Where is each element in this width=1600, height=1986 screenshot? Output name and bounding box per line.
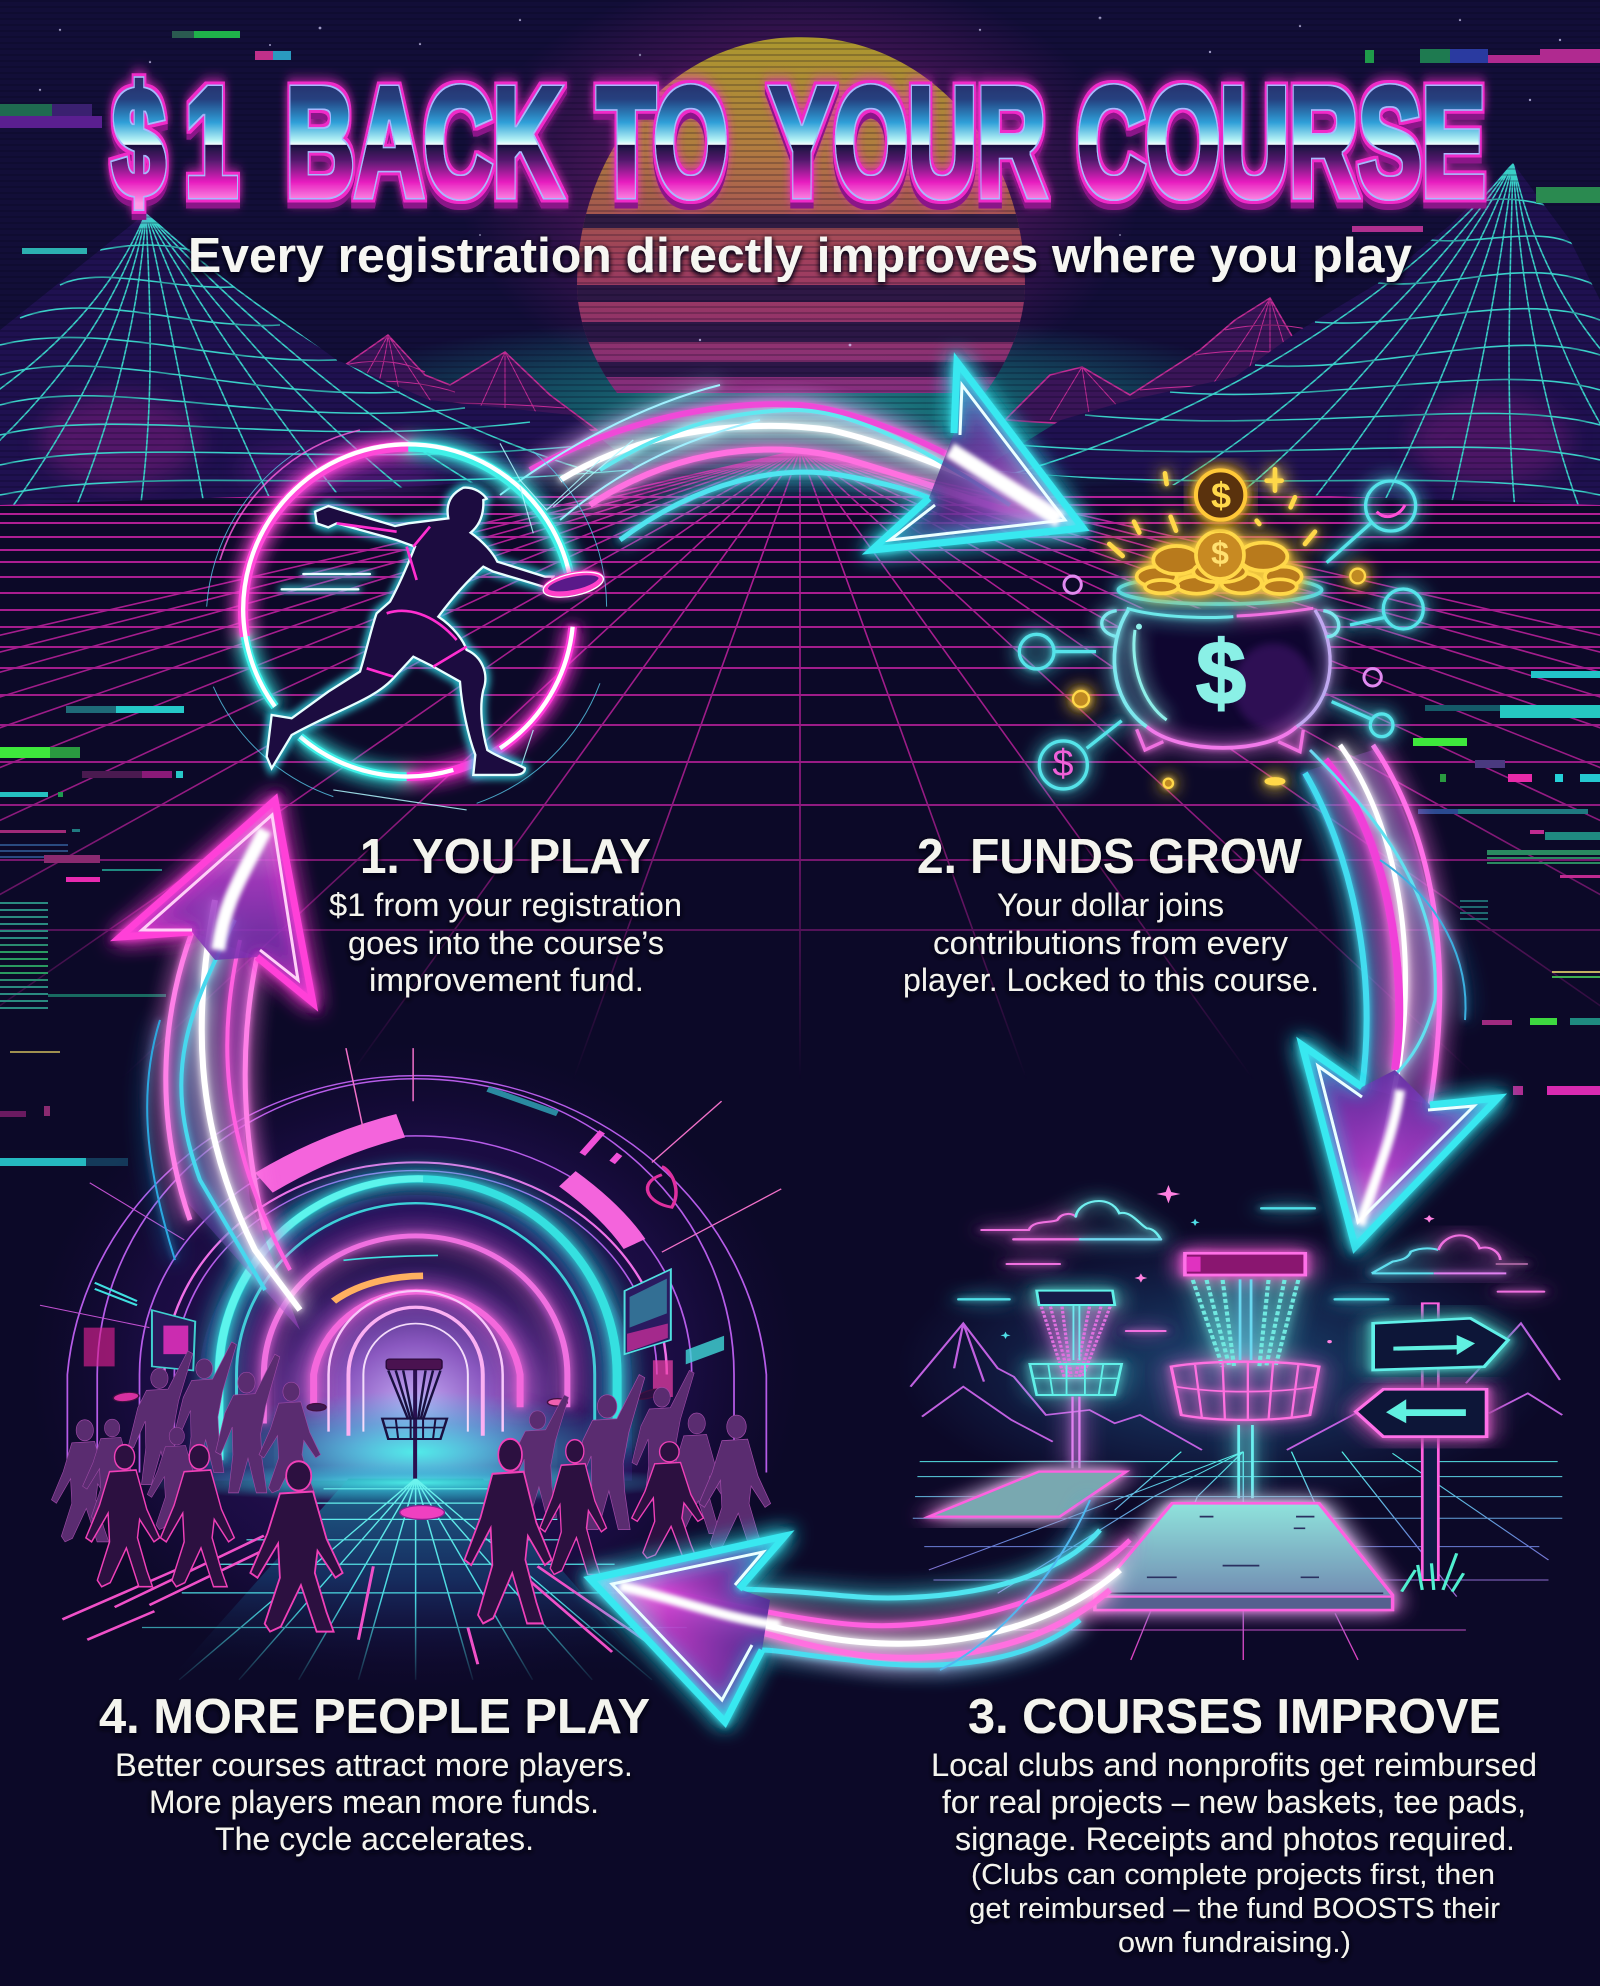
- large tee pad: [1095, 1503, 1392, 1610]
- title: BACK: [286, 57, 588, 229]
- step 3 text: [931, 1690, 1537, 1959]
- purple mountains: [320, 298, 1340, 440]
- arrow 4 head: [120, 800, 313, 1003]
- step 1 body: goes into the course’s: [348, 925, 664, 961]
- background: sky, sun and horizon: [0, 0, 1600, 505]
- dollar on pot: $: [1196, 624, 1246, 724]
- pot body: [1102, 576, 1339, 752]
- gold sparks: [1109, 469, 1315, 556]
- step 2 body: contributions from every: [933, 925, 1288, 961]
- step 2 body: [903, 887, 1319, 998]
- step 2 body: Your dollar joins: [997, 887, 1224, 923]
- tunnel core: [199, 1195, 632, 1481]
- subtitle: Every registration directly improves where you play: [188, 229, 1412, 283]
- step 3 body: signage. Receipts and photos required.: [955, 1821, 1515, 1857]
- tunnel glow: [28, 1040, 804, 1693]
- cloud left: [959, 1201, 1544, 1331]
- step 4 heading: 4. MORE PEOPLE PLAY: [99, 1690, 650, 1744]
- title: $: [112, 57, 165, 229]
- ring: [207, 430, 633, 810]
- arrow 1 head: [872, 362, 1083, 550]
- step 4 body: [115, 1747, 633, 1857]
- arrow 4: more people play to you play: [120, 800, 313, 1330]
- step 4 body: The cycle accelerates.: [215, 1821, 534, 1857]
- tunnel floor: [62, 1464, 694, 1680]
- crowd foreground: [86, 1439, 703, 1632]
- dollar on node: $: [1052, 743, 1074, 785]
- scene: pot of gold: [1019, 469, 1423, 789]
- title: TO: [597, 57, 754, 229]
- coin sparkles: [1073, 569, 1365, 788]
- step 3 note: (Clubs can complete projects first, then: [971, 1859, 1495, 1891]
- small basket: [1030, 1291, 1122, 1468]
- step 3 body: for real projects – new baskets, tee pads,: [942, 1784, 1526, 1820]
- crowd background: [51, 1342, 771, 1550]
- step 1 body: [329, 887, 682, 998]
- step 3 body: Local clubs and nonprofits get reimbursed: [931, 1747, 1537, 1783]
- step 3 note: [969, 1859, 1500, 1959]
- runner figure: [267, 488, 553, 775]
- speed lines: [282, 574, 370, 589]
- tunnel rings: [40, 1048, 781, 1472]
- right wireframe mountain: [980, 163, 1600, 510]
- scanlines: [0, 0, 1600, 500]
- stars: [39, 17, 1561, 346]
- arrow 2 head: [1302, 1045, 1498, 1247]
- pink bubbles: [1064, 505, 1405, 686]
- step 1 heading: 1. YOU PLAY: [360, 830, 651, 884]
- mountains: [910, 1323, 1562, 1450]
- sparkles: [1000, 1185, 1435, 1343]
- scene: new baskets, tee pads and signage: [897, 1185, 1571, 1660]
- arrow 3: courses improve to more people play: [590, 1500, 1130, 1722]
- step 4 body: More players mean more funds.: [149, 1784, 599, 1820]
- arrow 1: you play to funds grow: [500, 362, 1083, 550]
- step 3 heading: 3. COURSES IMPROVE: [968, 1690, 1501, 1744]
- step 2 heading: 2. FUNDS GROW: [917, 830, 1303, 884]
- network nodes: [1019, 481, 1423, 789]
- step 2 body: player. Locked to this course.: [903, 962, 1319, 998]
- step 1 body: improvement fund.: [369, 962, 644, 998]
- large basket: [1171, 1253, 1319, 1498]
- cloud right: [1372, 1235, 1528, 1273]
- scene floor grid: [913, 1452, 1562, 1660]
- dollar on top coin: $: [1211, 475, 1231, 516]
- sun: [570, 30, 1030, 400]
- basket in tunnel: [382, 1359, 447, 1479]
- glitch bars: [0, 31, 1600, 1166]
- scene glow: [897, 1227, 1558, 1507]
- title: YOUR: [770, 57, 1072, 229]
- arrow 2: funds grow to courses improve: [1300, 745, 1498, 1247]
- left wireframe mountain: [0, 213, 640, 510]
- step 3 note: get reimbursed – the fund BOOSTS their: [969, 1893, 1500, 1925]
- step 3 note: own fundraising.): [1118, 1927, 1351, 1959]
- step 2 text: [903, 830, 1319, 998]
- screens: [84, 1269, 724, 1397]
- title: 1: [185, 57, 264, 229]
- step 4 body: Better courses attract more players.: [115, 1747, 633, 1783]
- title: COURSE: [1077, 57, 1485, 229]
- thrown disc: [541, 567, 606, 602]
- scene: runner in neon ring: [207, 430, 633, 810]
- horizon line: [910, 1448, 1571, 1456]
- floor grid: [0, 450, 1600, 1100]
- small tee pad: [929, 1472, 1126, 1517]
- step 3 body: [931, 1747, 1537, 1857]
- scene: tunnel with crowd: [28, 1040, 804, 1693]
- step 1 text: [329, 830, 682, 998]
- coin pile: [1137, 531, 1302, 594]
- signpost: [1356, 1303, 1508, 1592]
- flying coin: [1196, 470, 1245, 520]
- arrow 3 head: [590, 1536, 785, 1722]
- step 4 text: [99, 1690, 650, 1857]
- flying discs: [112, 1387, 664, 1519]
- dollar on pile coin: $: [1211, 535, 1229, 571]
- step 1 body: $1 from your registration: [329, 887, 682, 923]
